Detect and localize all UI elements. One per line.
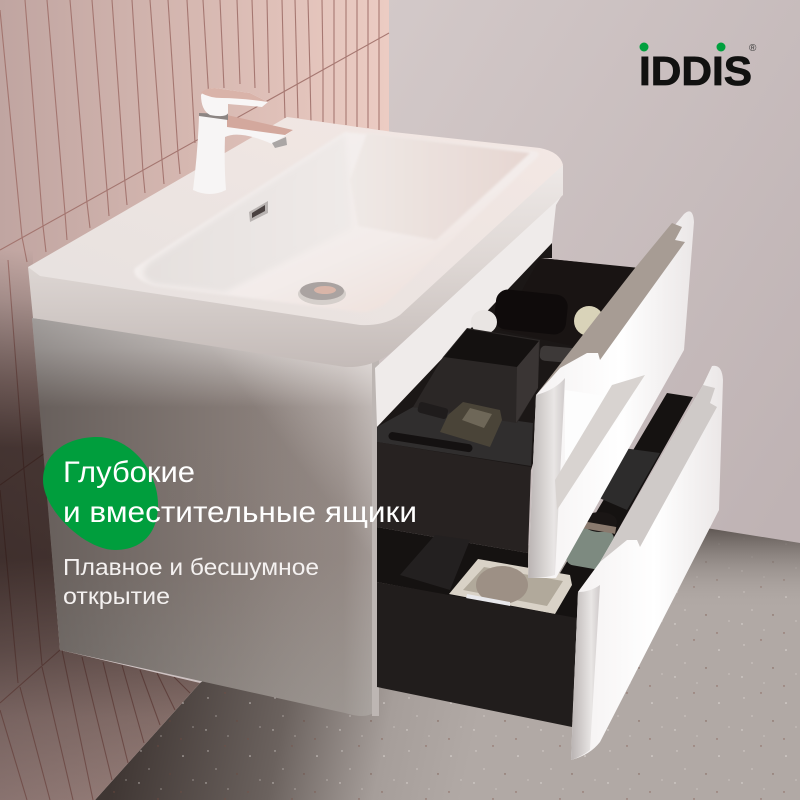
overflow	[249, 201, 268, 222]
tray	[449, 559, 572, 614]
washbasin	[28, 117, 563, 367]
subheading: открытие	[63, 583, 170, 609]
drawer towel floor	[377, 407, 533, 466]
vanity cabinet body	[32, 318, 379, 716]
subheading	[63, 554, 319, 609]
pink wall tiles	[0, 0, 389, 800]
floor	[95, 528, 800, 800]
perfume bottle	[417, 401, 502, 447]
subheading: Плавное и бесшумное	[63, 554, 319, 580]
heading	[63, 456, 417, 529]
heading: Глубокие	[63, 456, 195, 489]
heading: и вместительные ящики	[63, 496, 417, 529]
sponge	[574, 306, 604, 336]
pumice stone	[476, 566, 528, 604]
lower drawer interior	[377, 393, 693, 727]
bowl	[134, 132, 539, 312]
top drawer front panel	[528, 211, 694, 578]
basin front lip	[28, 165, 563, 367]
jar	[565, 512, 617, 572]
bowl inner shelf	[350, 133, 530, 240]
white label	[466, 594, 510, 607]
cabinet upper side panel	[375, 195, 562, 427]
black tool on towel	[388, 431, 473, 453]
bowl back wall	[144, 134, 352, 292]
top drawer handle strip	[536, 223, 685, 395]
tube	[539, 345, 579, 364]
logo: ®	[749, 43, 757, 54]
organiser box	[413, 328, 540, 423]
logo: IDDIS	[639, 48, 752, 94]
rolled black cosmetic bag	[493, 288, 569, 336]
top drawer interior	[377, 243, 640, 553]
white item behind drawer	[471, 310, 497, 334]
basin deck	[28, 117, 563, 325]
towel	[597, 448, 660, 510]
lower drawer side wall	[377, 582, 577, 727]
lower drawer front panel	[571, 366, 723, 760]
drain plug	[298, 282, 346, 305]
green blob	[43, 437, 158, 550]
top drawer side wall	[377, 442, 531, 553]
lower drawer handle strip	[600, 385, 717, 562]
faucet	[193, 88, 293, 194]
